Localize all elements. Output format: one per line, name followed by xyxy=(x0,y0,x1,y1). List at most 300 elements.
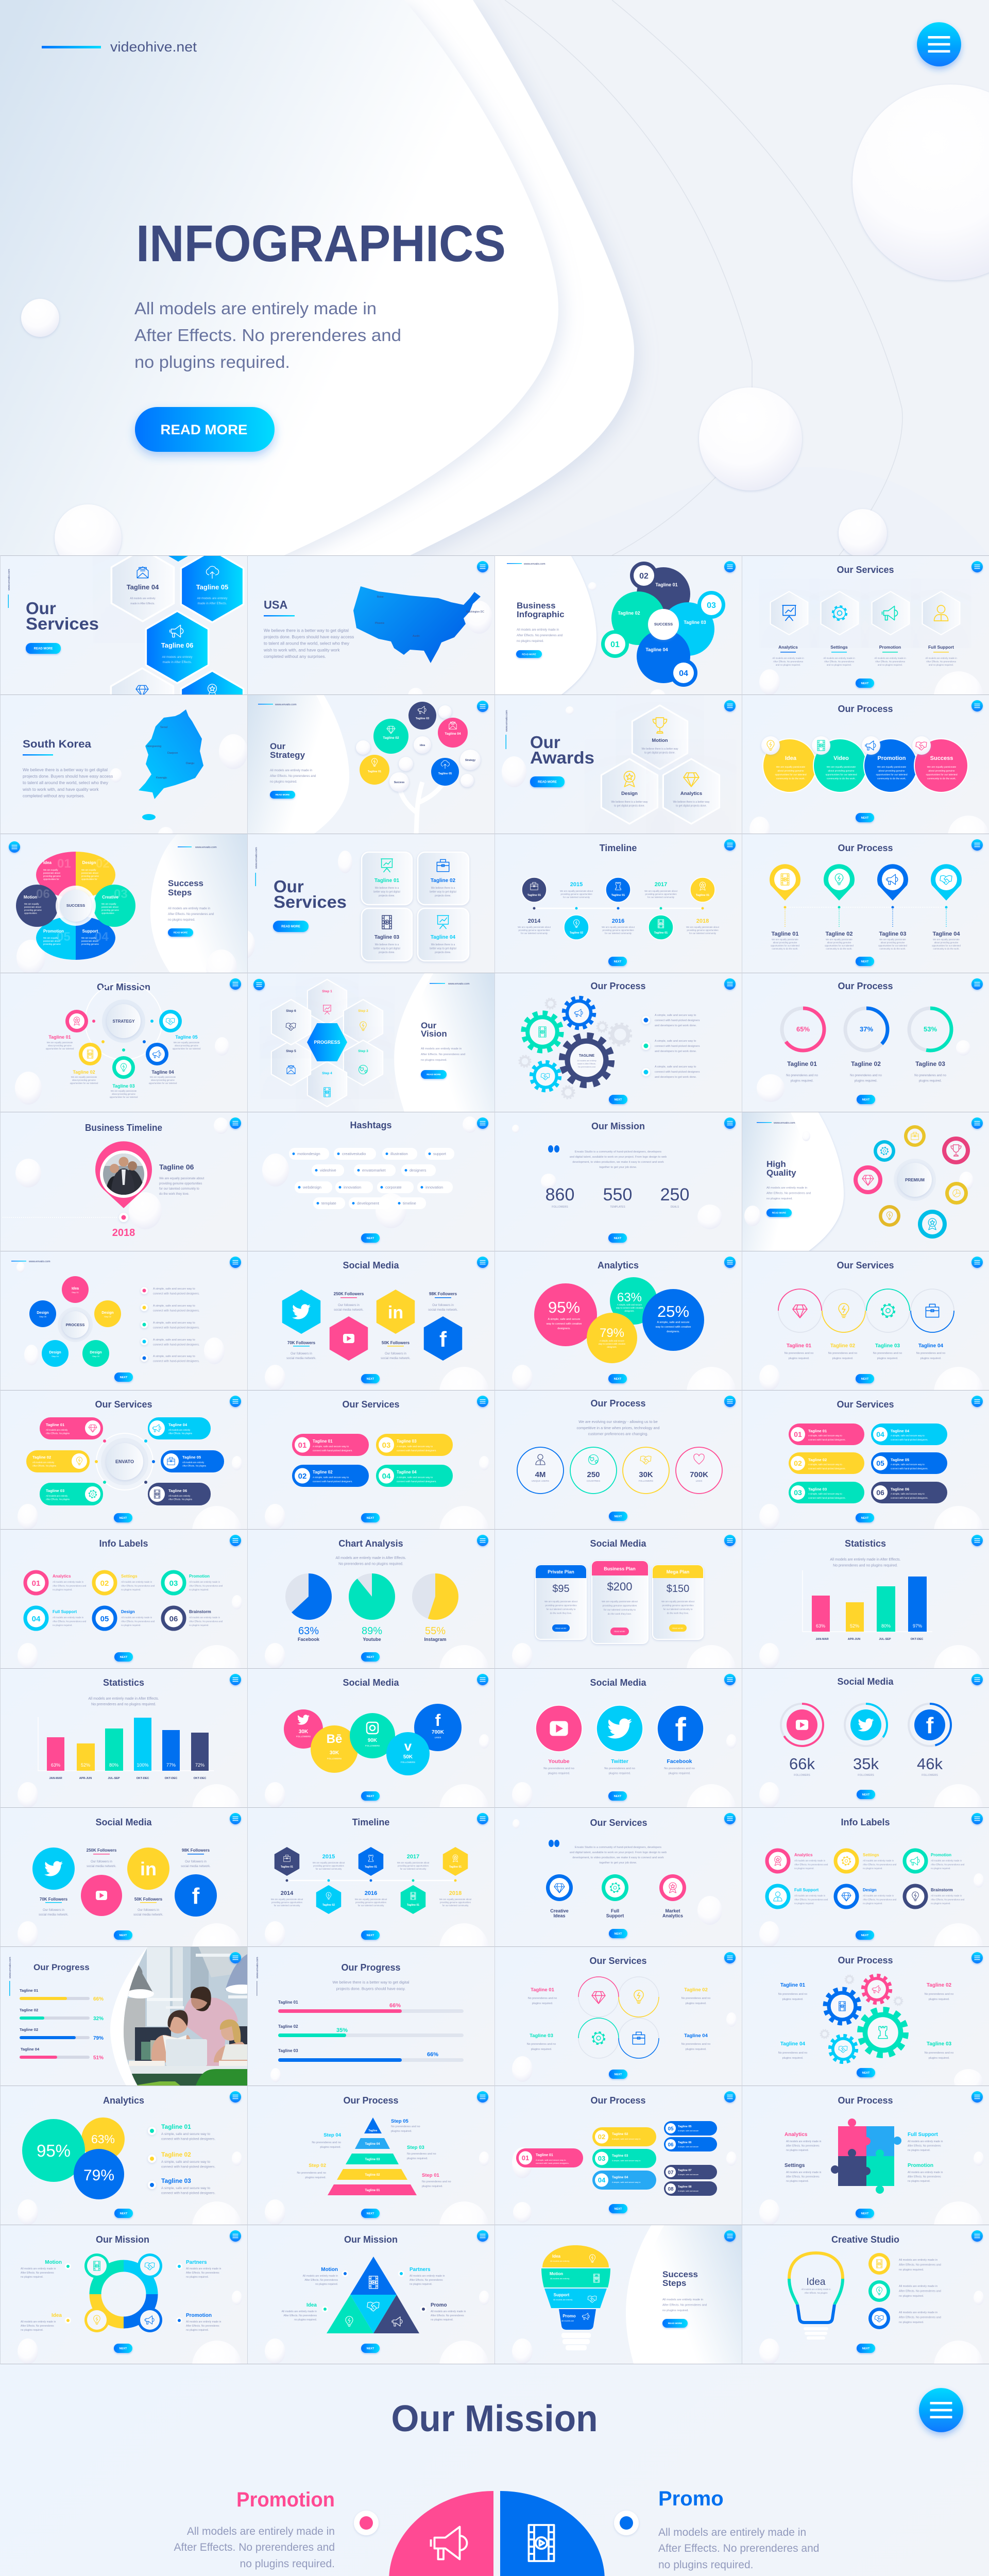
legend: Tagline 01 xyxy=(161,2123,191,2130)
button xyxy=(26,643,61,654)
process notes: and developers to get work done. xyxy=(655,1024,697,1027)
map: South Korea: Hongseong xyxy=(147,745,161,748)
labels xyxy=(785,2132,943,2183)
labels: Partners xyxy=(410,2267,431,2273)
label text: All models are entirely made in xyxy=(794,1894,825,1897)
bar chart: 77% xyxy=(166,1762,176,1768)
label: Promotion: All models are entirely made in xyxy=(187,2526,335,2537)
bubble chart: way to connect with creative xyxy=(546,1323,582,1326)
step labels: Step 02 xyxy=(309,2163,326,2168)
disc cluster: 02 xyxy=(639,572,649,581)
gears: made in After Effects. xyxy=(577,1063,596,1065)
label text: no plugins required. xyxy=(863,1867,883,1870)
strategy diagram: Tagline 03 xyxy=(112,1083,135,1089)
ring icons xyxy=(781,1704,951,1746)
progress bars: Tagline 02 xyxy=(278,2024,298,2029)
label text: no plugins required. xyxy=(189,1588,209,1591)
labels: No prerenderes and no xyxy=(925,2052,953,2055)
heading: Steps xyxy=(662,2278,686,2288)
hexagon labels: Step 3 xyxy=(358,1049,368,1053)
labels: plugins required. xyxy=(929,2057,950,2060)
slide: Social Media three icons: NEXT xyxy=(614,1795,622,1798)
follower stats xyxy=(286,1292,458,1360)
chip dots and names: motiondesign xyxy=(297,1151,320,1156)
slide: Social Media pricing xyxy=(494,1529,742,1697)
hexagon grid: All models are entirely xyxy=(130,597,156,600)
service icons and labels xyxy=(785,1303,945,1360)
button xyxy=(662,2319,688,2328)
feature rings: Creative xyxy=(550,1908,569,1913)
labels: All models are entirely made in xyxy=(786,2171,821,2174)
timeline: 2017 xyxy=(655,882,667,888)
follower stats: 250K Followers xyxy=(334,1292,364,1296)
chip dots and names: webdesign xyxy=(302,1185,321,1190)
labels: Settings xyxy=(830,645,848,650)
slide: Our Services quote xyxy=(494,1807,742,1946)
mid pills: Tagline 04 xyxy=(612,2176,628,2179)
ring icons and labels: No prerenderes and no xyxy=(527,2043,556,2046)
slide: Timeline circles: NEXT xyxy=(614,960,622,963)
bulb text: After Effects. No plugins xyxy=(805,2292,827,2294)
social labels: Twitter xyxy=(611,1758,628,1765)
slide: Our Mission quote: NEXT xyxy=(614,1237,622,1240)
bubble chart: designers. xyxy=(667,1330,680,1333)
timeline: providing genuine opportunities xyxy=(313,1865,344,1867)
slide: Social Media circles cluster: NEXT xyxy=(367,1795,374,1798)
pills: connect with hand-picked designers. xyxy=(397,1449,437,1452)
label text: Settings xyxy=(863,1853,879,1857)
pills: A simple, safe and secure way to xyxy=(313,1477,349,1479)
legend: connect with hand-picked designers. xyxy=(161,2192,215,2195)
tree with circles: Tagline 02 xyxy=(383,736,399,740)
timeline: providing genuine opportunities xyxy=(687,929,719,931)
slide: High Quality: After Effects. No prerenderes and xyxy=(766,1192,811,1195)
pyramid: Tagline 02 xyxy=(365,2174,380,2177)
disc cluster: Tagline 04 xyxy=(645,647,668,652)
pills: connect with hand-picked designers. xyxy=(397,1480,437,1483)
step labels: plugins required. xyxy=(391,2130,412,2133)
triangle xyxy=(327,2257,419,2333)
follower counts: FOLLOWERS xyxy=(922,1774,938,1777)
slide: process list: NEXT xyxy=(120,1376,128,1379)
flower petals: providing genuine xyxy=(101,909,120,911)
pie labels: 63% xyxy=(298,1625,319,1637)
label text: 03 xyxy=(169,1579,178,1588)
gears xyxy=(519,998,631,1098)
header link: www.envato.com xyxy=(448,982,470,986)
pyramid: Tagline 04 xyxy=(365,2143,380,2146)
ring icons and labels: Tagline 02 xyxy=(684,1987,708,1993)
mid pills: Tagline 03 xyxy=(612,2154,628,2158)
service pills: After Effects. No plugins xyxy=(168,1498,192,1500)
heading: Our xyxy=(530,733,560,752)
list items: connect with hand-picked designers. xyxy=(153,1310,200,1313)
pins: opportunities for our talented xyxy=(932,944,961,947)
slide: Our Services six pills: NEXT xyxy=(861,1517,869,1520)
pins: opportunities for our talented xyxy=(878,944,907,947)
social labels: No prerenderes and no xyxy=(604,1767,635,1770)
labels: After Effects. No prerenderes xyxy=(824,660,855,663)
heading: Business Timeline xyxy=(85,1123,162,1133)
service pills: Tagline 06 xyxy=(168,1488,187,1493)
follower stats: Our followers in xyxy=(338,1304,360,1307)
bar chart: APR-JUN xyxy=(79,1777,92,1780)
follower stats: 98K Followers xyxy=(429,1292,457,1296)
labels: After Effects. No prerenderes xyxy=(21,2272,54,2275)
slide: Creative Studio xyxy=(742,2225,989,2392)
heading: Our Services xyxy=(95,1399,152,1410)
main pill 01: connect with hand-picked designers. xyxy=(536,2162,569,2164)
service icons and labels: plugins required. xyxy=(877,1357,898,1360)
puzzle pieces xyxy=(831,2119,901,2194)
slide: Our Process stat circles: NEXT xyxy=(615,1515,622,1518)
follower stats: social media network. xyxy=(286,1357,316,1360)
slide: Our Process puzzle: NEXT xyxy=(861,2212,869,2215)
pills: Tagline 02 xyxy=(808,1458,827,1462)
slide: Our Services hexagons: www.envato.com xyxy=(8,569,11,591)
heading: Chart Analysis xyxy=(338,1538,403,1549)
slide: Our Progress bars xyxy=(247,1946,494,2086)
map: USA: Austin xyxy=(413,635,420,638)
label text: After Effects. No prerenderes and xyxy=(189,1585,223,1587)
hero description: All models are entirely made in xyxy=(134,299,377,318)
ring xyxy=(95,2266,152,2323)
pills: Tagline 06 xyxy=(891,1487,909,1492)
four overlapping circles: We are equally passionate xyxy=(827,766,856,769)
pricing card: private plan: $95 xyxy=(552,1583,570,1595)
labels: After Effects. No prerenderes xyxy=(908,2175,941,2178)
pins and notes xyxy=(868,2253,941,2329)
service icons and labels: plugins required. xyxy=(832,1357,854,1360)
flower petals: Creative xyxy=(102,895,118,900)
small pills: Tagline 07 xyxy=(678,2169,691,2172)
bubble chart: designers. xyxy=(557,1327,571,1330)
timeline: Tagline 01 xyxy=(527,894,541,897)
service icons and labels: Tagline 04 xyxy=(918,1343,944,1349)
follower stats: Our followers in xyxy=(385,1352,406,1355)
social hexagons: in xyxy=(388,1303,403,1323)
body text: We believe there is a better way to get digital xyxy=(264,628,349,633)
slide: Analytics bubbles xyxy=(494,1251,742,1418)
slide: High Quality xyxy=(742,1112,989,1251)
social labels: No prerenderes and no xyxy=(543,1767,574,1770)
slide: Success Steps bulb: no plugins required. xyxy=(662,2309,689,2312)
labels: Tagline 04 xyxy=(780,2041,806,2047)
chip dots and names: envatomarket xyxy=(362,1168,386,1173)
pins and notes: After Effects. No prerenderes and xyxy=(899,2264,941,2267)
body text: We believe there is a better way to get digital xyxy=(23,767,108,772)
feature rings: Ideas xyxy=(553,1913,566,1919)
small pills: Tagline 05 xyxy=(678,2125,691,2128)
bubbles: 79% xyxy=(83,2167,114,2184)
pricing card: private plan: READ MORE xyxy=(555,1628,567,1630)
bar chart: OKT-DEC xyxy=(911,1638,923,1641)
label text: no plugins required. xyxy=(53,1588,73,1591)
slide: Our Services four pills: NEXT xyxy=(367,1517,374,1520)
pricing card: mega plan: for our talented community to xyxy=(663,1608,693,1611)
slide: Statistics six bars: No prerenderes and no plugins required. xyxy=(91,1703,156,1706)
label: Promotion: After Effects. No prerenderes and xyxy=(174,2541,335,2553)
bulb: Idea xyxy=(552,2254,561,2259)
decorative spheres xyxy=(21,84,989,571)
header link: www.envato.com xyxy=(28,1260,50,1263)
service pills: Tagline 04 xyxy=(168,1422,187,1427)
label text: All models are entirely made in xyxy=(931,1859,962,1862)
flower petals: opportunities for xyxy=(81,878,97,880)
feature rings: Full xyxy=(611,1908,619,1913)
mid pills: 04 xyxy=(598,2176,606,2184)
process hub: Design xyxy=(90,1351,102,1354)
labels: All models are entirely made in xyxy=(186,2267,221,2270)
pyramid: Tagline 03 xyxy=(365,2158,380,2161)
labels: All models are entirely made in xyxy=(431,2310,466,2313)
social bubbles: 50K xyxy=(403,1754,413,1760)
bubble chart: way to connect with creative xyxy=(599,1343,626,1345)
progress bars: Tagline 01 xyxy=(278,2000,298,2005)
follower counts: FOLLOWERS xyxy=(858,1774,874,1777)
label: Promo: After Effects. No prerenderes and xyxy=(658,2543,819,2554)
hexagon grid: Tagline 04 xyxy=(127,583,159,591)
heading: Infographic xyxy=(517,609,565,619)
quote xyxy=(549,1840,667,1865)
process hub: Step 05 xyxy=(39,1315,47,1318)
list items: connect with hand-picked designers. xyxy=(153,1360,200,1363)
hexagon labels: Step 2 xyxy=(358,1009,368,1013)
labels: All models are entirely made in xyxy=(282,2310,317,2313)
labels: Full Support xyxy=(908,2132,939,2138)
step labels: No prerenderes and no xyxy=(391,2125,420,2128)
follower stats: 50K Followers xyxy=(134,1897,163,1902)
card contents: better way to get digital xyxy=(430,947,456,950)
hexagon cards: Motion xyxy=(652,738,668,743)
statistics: 250 xyxy=(660,1185,689,1205)
step labels: plugins required. xyxy=(422,2185,443,2188)
legend: A simple, safe and secure way to xyxy=(161,2160,210,2164)
timeline: Tagline 01 xyxy=(611,894,625,897)
pricing card: private plan: We are equally passionate about xyxy=(544,1600,577,1603)
labels: no plugins required. xyxy=(908,2149,930,2152)
social bubbles: v xyxy=(404,1738,412,1754)
map: USA xyxy=(353,586,484,663)
step labels: Step 03 xyxy=(407,2145,424,2150)
slide: Social Media three icons xyxy=(494,1668,742,1836)
labels: Motion xyxy=(321,2267,338,2273)
four overlapping circles: opportunities for our talented xyxy=(825,773,857,776)
hexagon grid xyxy=(111,489,244,743)
card contents: Tagline 02 xyxy=(431,878,456,884)
ring icons and labels: No prerenderes and no xyxy=(681,2043,710,2046)
small pills xyxy=(664,2121,717,2196)
pills xyxy=(292,1434,453,1487)
flower petals: 01 xyxy=(57,857,71,871)
timeline: providing genuine opportunities xyxy=(440,1901,471,1904)
labels: All models are entirely made in xyxy=(925,657,957,659)
card contents: better way to get digital xyxy=(430,890,456,893)
ring icons and labels: Tagline 01 xyxy=(531,1987,555,1993)
follower counts: 66k xyxy=(789,1755,815,1773)
step labels: plugins required. xyxy=(407,2157,428,2160)
pills: connect with hand-picked designers. xyxy=(808,1497,846,1499)
step labels: plugins required. xyxy=(305,2176,326,2179)
heading: Our xyxy=(274,877,304,896)
heading: Creative Studio xyxy=(831,2234,899,2245)
disc cluster: Tagline 01 xyxy=(655,582,678,587)
list items: connect with hand-picked designers. xyxy=(153,1292,200,1295)
label text: All models are entirely made in xyxy=(189,1581,220,1583)
list items: A simple, safe and secure way to xyxy=(153,1304,195,1308)
heading: Steps xyxy=(168,888,192,897)
timeline: We are equally passionate about xyxy=(355,1898,387,1901)
donut charts xyxy=(782,1008,951,1050)
slide: Our Mission quote xyxy=(494,1112,742,1251)
heading: Business xyxy=(517,601,556,611)
timeline: 2017 xyxy=(407,1854,419,1860)
heading: Our Mission xyxy=(591,1121,645,1131)
labels: After Effects. No prerenderes xyxy=(186,2272,219,2275)
gears: All models are entirely xyxy=(577,1060,596,1062)
slide: Chart Analysis xyxy=(247,1529,494,1697)
small pills: A simple, safe and secure xyxy=(678,2190,698,2192)
slide: Our Services rings quad xyxy=(494,1946,742,2086)
labels: No prerenderes and no xyxy=(778,2052,807,2055)
social circles: f xyxy=(192,1884,200,1909)
label: Promotion xyxy=(174,2488,335,2570)
pills: connect with hand-picked designers. xyxy=(891,1438,928,1441)
pills xyxy=(789,1423,947,1503)
flower petals: We are equally xyxy=(43,937,58,939)
service pills: All models are entirely xyxy=(46,1429,67,1431)
labels: All models are entirely made in xyxy=(21,2320,56,2324)
ring icons and labels: Tagline 03 xyxy=(530,2033,553,2039)
ring icons and labels: plugins required. xyxy=(532,2002,553,2005)
step labels: No prerenderes and no xyxy=(297,2172,326,2175)
flower petals: providing genuine xyxy=(81,875,99,877)
strategy diagram: STRATEGY xyxy=(113,1019,135,1024)
timeline: 2015 xyxy=(570,882,583,888)
timeline: for our talented community xyxy=(442,1904,469,1907)
chip dots and names: innovation xyxy=(344,1185,361,1190)
pills: Tagline 01 xyxy=(808,1429,827,1433)
button: READ MORE xyxy=(772,1212,786,1214)
label text: All models are entirely made in xyxy=(189,1616,220,1619)
process notes xyxy=(642,1014,700,1079)
pie labels: Youtube xyxy=(363,1637,381,1642)
follower stats: Our followers in xyxy=(138,1909,159,1912)
label text: Full Support xyxy=(53,1609,77,1614)
legend: connect with hand-picked designers. xyxy=(161,2165,215,2169)
slide: Our Mission triangle: NEXT xyxy=(367,2347,374,2350)
follower stats: 70K Followers xyxy=(40,1897,68,1902)
slide: Our Process gears labelled: NEXT xyxy=(862,2072,870,2075)
label text: Design xyxy=(863,1888,877,1892)
statistics: 860 xyxy=(545,1185,574,1205)
bulb icons xyxy=(431,2525,561,2576)
pricing card: business plan: READ MORE xyxy=(614,1631,625,1633)
labels: After Effects. No prerenderes xyxy=(21,2325,54,2328)
flower petals: passionate about xyxy=(43,940,61,942)
labels: plugins required. xyxy=(782,1998,804,2001)
flower petals: providing genuine xyxy=(43,943,61,945)
heading: Success xyxy=(662,2269,698,2279)
heading: Timeline xyxy=(352,1817,389,1827)
pie labels: 55% xyxy=(425,1625,446,1637)
service pills: Tagline 02 xyxy=(32,1455,51,1460)
title: Our Mission: Our Mission xyxy=(391,2398,598,2439)
ring icons and labels: No prerenderes and no xyxy=(528,1997,557,2000)
heading: Social Media xyxy=(837,1676,894,1687)
pills: 02 xyxy=(794,1459,802,1467)
hexagon cards: to get digital projects done. xyxy=(614,805,645,808)
label text: 06 xyxy=(169,1615,178,1623)
labels: All models are entirely made in xyxy=(823,657,855,659)
social circles xyxy=(536,1705,704,1752)
timeline: We are equally passionate about xyxy=(397,1861,429,1864)
gears xyxy=(820,1975,906,2062)
slide: Business Infographic: After Effects. No prerenderes and xyxy=(517,634,562,637)
timeline: Tagline 02 xyxy=(570,931,583,935)
slide: Our Services rings quad: NEXT xyxy=(615,2073,622,2076)
four overlapping circles: about providing genuine xyxy=(878,770,905,773)
chip dots and names: template xyxy=(321,1201,336,1206)
values and labels: Tagline 03 xyxy=(915,1060,945,1067)
flower petals: 06 xyxy=(36,887,50,901)
four overlapping circles: opportunities for our talented xyxy=(775,773,807,776)
pricing card: private plan: for our talented community to xyxy=(547,1608,576,1611)
slide: Info Labels icons: NEXT xyxy=(861,1934,869,1937)
main pill 01 xyxy=(516,2148,583,2167)
pins: about providing genuine xyxy=(934,941,959,944)
stat circles xyxy=(517,1447,722,1494)
card contents: Tagline 01 xyxy=(374,878,400,884)
card contents: We believe there is a xyxy=(431,943,455,946)
labels: After Effects. No prerenderes xyxy=(410,2279,443,2282)
slide: Our Process tree pills xyxy=(494,2086,742,2225)
hexagon grid: Tagline 06 xyxy=(161,641,193,649)
labels: no plugins required. xyxy=(786,2149,809,2152)
label text: no plugins required. xyxy=(794,1902,814,1905)
tagline text xyxy=(159,1163,204,1196)
slide: Our Process donuts xyxy=(742,973,989,1112)
pricing card: mega plan: We are equally passionate about xyxy=(661,1600,694,1603)
four overlapping circles: Success xyxy=(930,755,953,761)
legend xyxy=(148,2123,215,2195)
pricing card: private plan: do the work they love. xyxy=(550,1612,572,1615)
strategy diagram: opportunities for our talented xyxy=(110,1096,138,1098)
slide: Social Media rings xyxy=(742,1668,989,1836)
social bubbles: FOLLOWERS xyxy=(365,1744,380,1747)
premium hub xyxy=(854,1125,970,1239)
labels: All models are entirely made in xyxy=(410,2275,445,2278)
timeline marker: 2018 xyxy=(112,1227,135,1239)
list items: connect with hand-picked designers. xyxy=(153,1344,200,1347)
strategy diagram: We are equally passionate xyxy=(111,1090,137,1092)
bar chart: APR-JUN xyxy=(848,1638,860,1641)
center hexagon: progress: PROGRESS xyxy=(314,1040,340,1045)
values and labels: Tagline 01 xyxy=(787,1060,817,1067)
feature rings: Market xyxy=(665,1908,680,1913)
disc cluster xyxy=(601,562,725,687)
ring icons and labels: plugins required. xyxy=(531,2048,552,2051)
pins: about providing genuine xyxy=(827,941,851,944)
bar chart: JAN-MAR xyxy=(49,1777,62,1780)
button: read more: READ MORE xyxy=(161,422,247,437)
main pill 01: A simple, safe and secure way to xyxy=(536,2159,566,2161)
pins and notes: no plugins required. xyxy=(899,2295,924,2298)
four overlapping circles: Idea xyxy=(785,755,797,761)
pills: A simple, safe and secure way to xyxy=(397,1446,433,1448)
pills: 01 xyxy=(298,1441,306,1450)
timeline: We are equally passionate about xyxy=(686,926,719,928)
